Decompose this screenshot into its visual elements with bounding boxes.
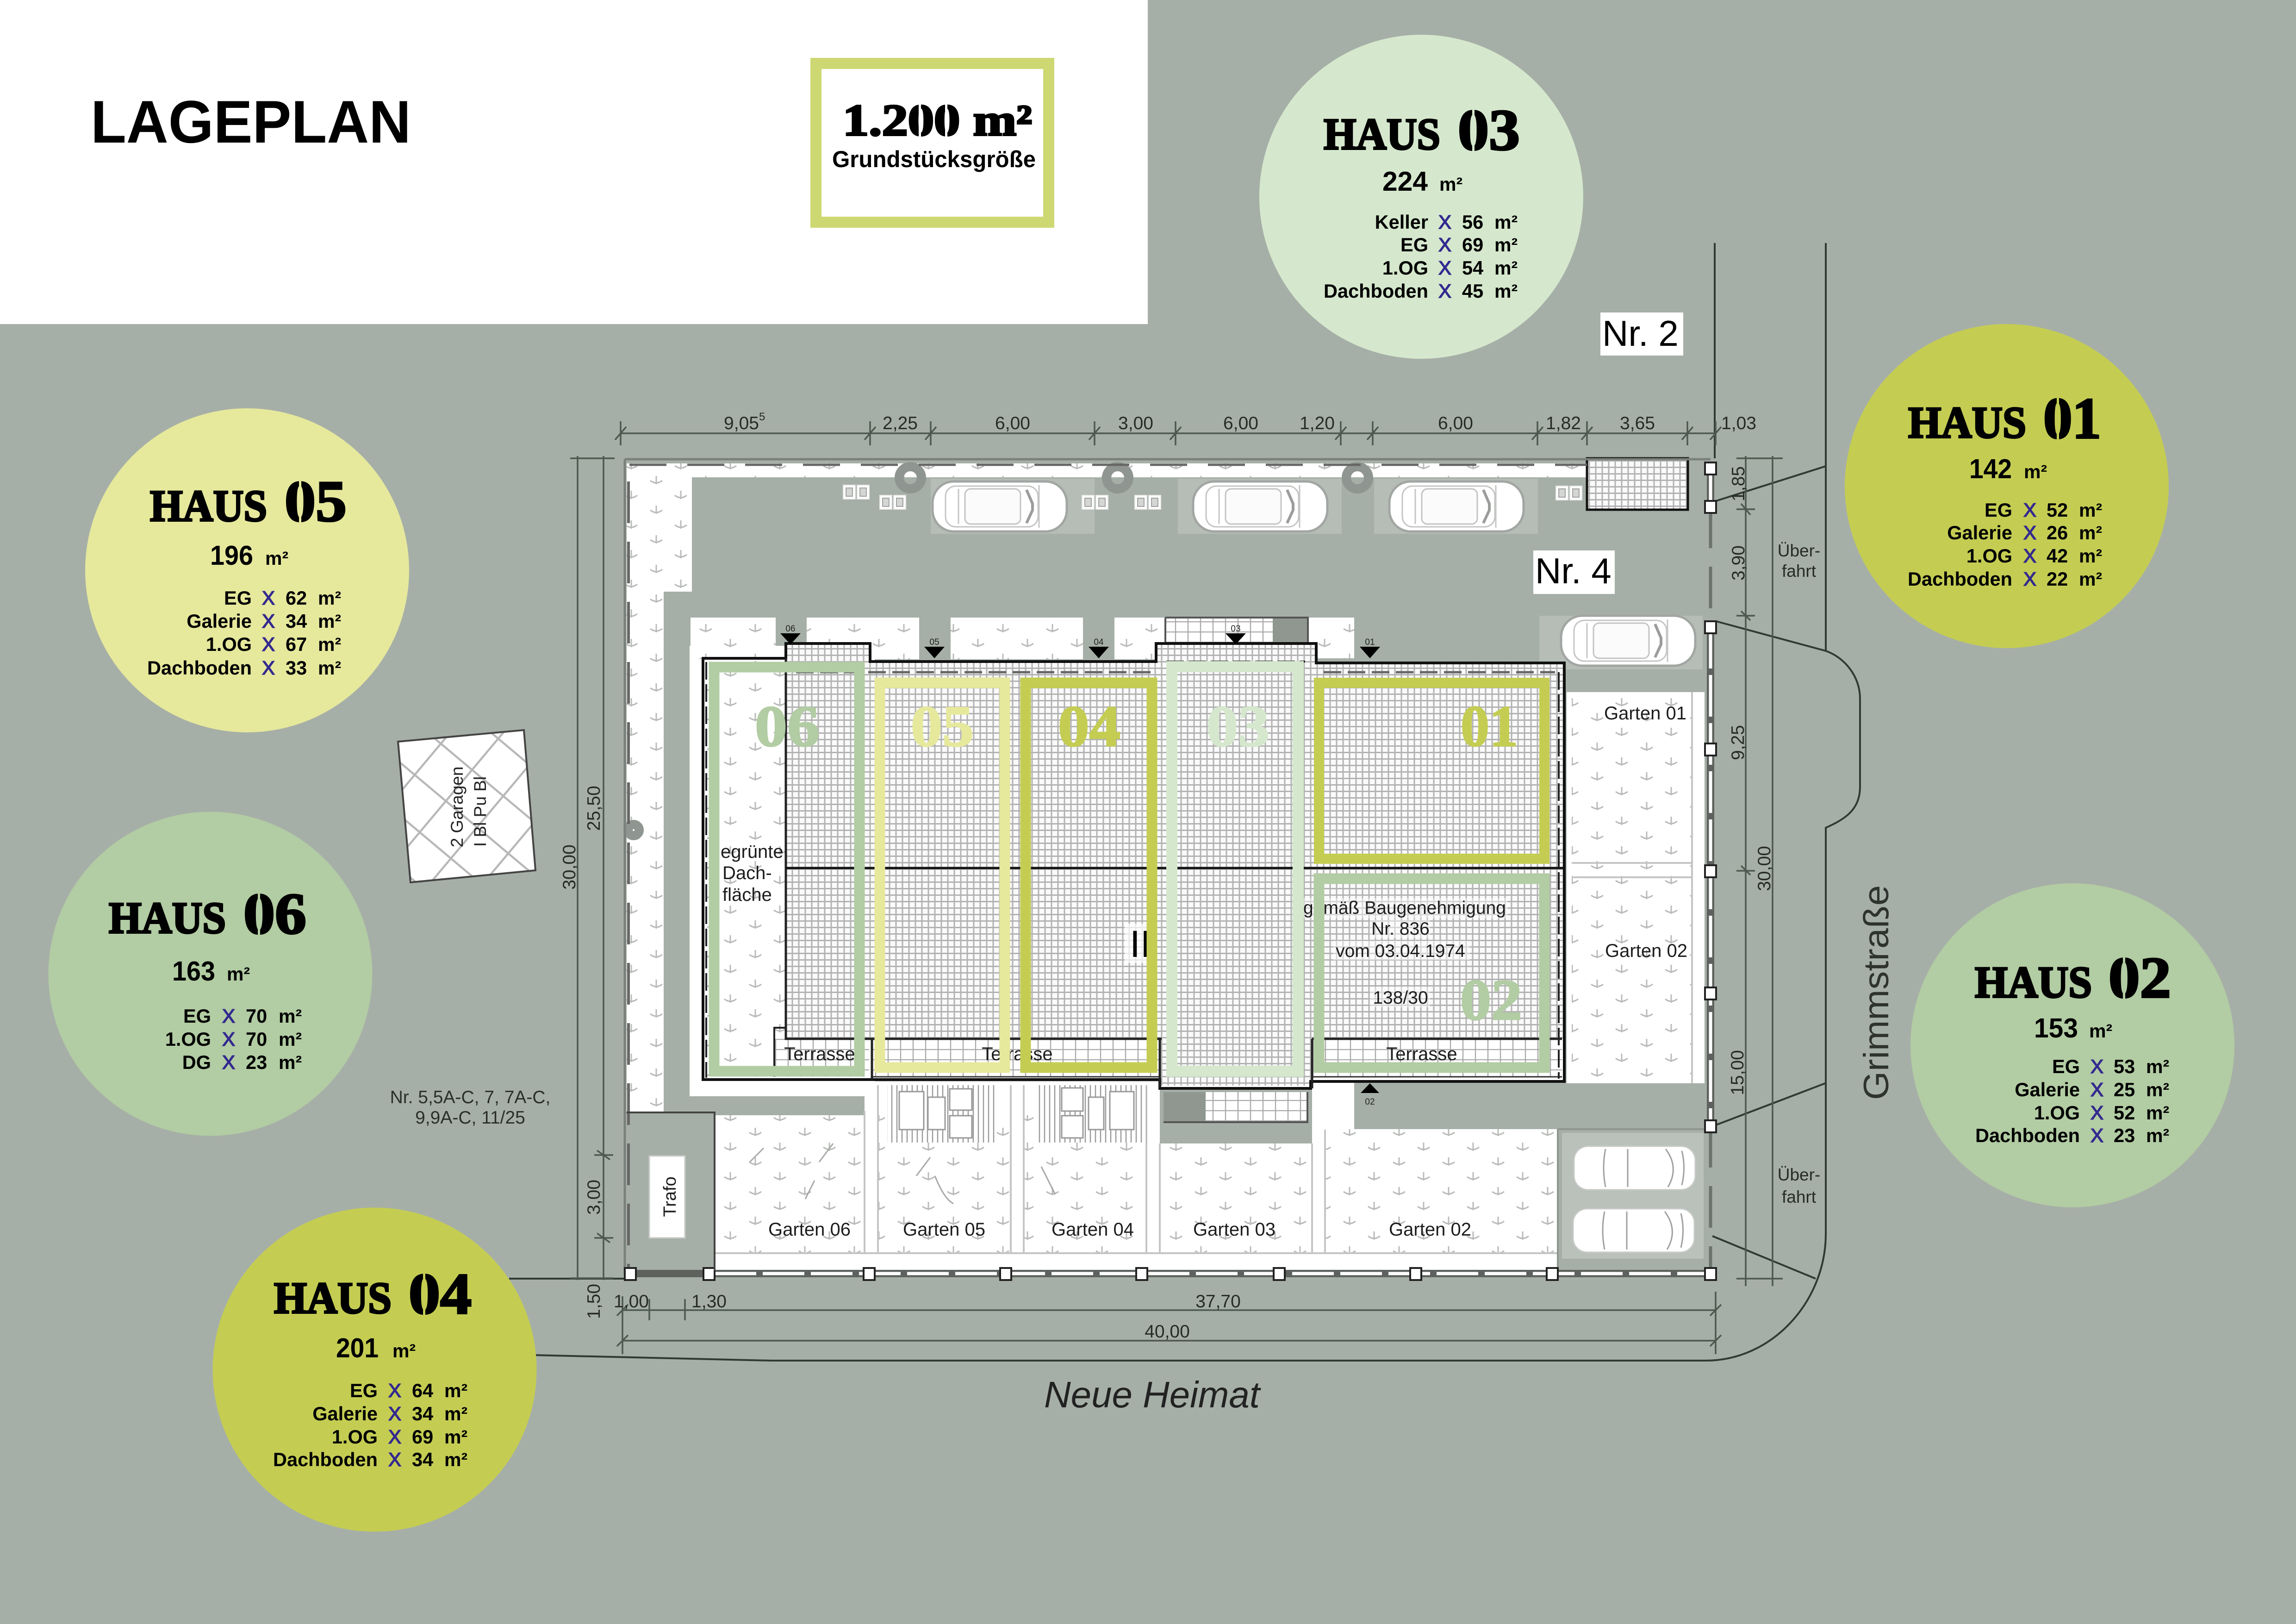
area rows (1975, 1056, 2169, 1146)
area rows: X (2091, 1102, 2103, 1124)
area rows: 1.OG (2034, 1102, 2080, 1124)
heading: 03 (1458, 98, 1520, 162)
entrance markers (780, 624, 1380, 1107)
area rows: 25 (2114, 1079, 2135, 1100)
area rows: X (262, 587, 275, 609)
total area: m² (2024, 461, 2047, 482)
area rows (1324, 211, 1518, 302)
heading: 02 (2109, 946, 2171, 1010)
dimension labels: 25,50 (584, 786, 604, 831)
area rows: EG (1400, 234, 1428, 256)
area rows: X (2091, 1056, 2103, 1077)
plan labels: Garten 04 (1052, 1219, 1134, 1240)
total area (336, 1333, 416, 1363)
plot size value: 1.200 m² (843, 95, 1032, 145)
neighbouring garages: 2 Garagen (448, 767, 467, 847)
area rows: EG (2052, 1056, 2080, 1077)
area rows: 52 (2047, 499, 2068, 521)
heading (109, 882, 306, 946)
building permit note: Nr. 836 (1371, 919, 1430, 939)
entrance markers: 01 (1365, 637, 1375, 647)
area rows: 62 (286, 587, 307, 609)
area rows: m² (318, 657, 341, 679)
area rows: EG (350, 1380, 378, 1401)
plan labels: Terrasse (784, 1044, 855, 1064)
total area: m² (2089, 1020, 2112, 1042)
heading: 01 (2043, 387, 2101, 451)
house number: 02: 02 (1460, 968, 1522, 1032)
building footprint (703, 643, 1564, 1088)
heading (1975, 946, 2171, 1010)
heading: HAUS (109, 893, 226, 943)
total area: 153 (2034, 1013, 2078, 1043)
area rows: m² (2079, 500, 2102, 521)
area rows: m² (444, 1403, 467, 1424)
total area: 142 (1969, 454, 2012, 484)
building permit note: vom 03.04.1974 (1336, 941, 1465, 961)
area rows: X (2023, 545, 2036, 567)
heading: HAUS (1975, 957, 2092, 1007)
area rows: 1.OG (332, 1426, 378, 1448)
dimension labels: 37,70 (1195, 1292, 1241, 1312)
area rows: m² (2146, 1125, 2169, 1146)
entrance markers: 05 (929, 637, 940, 647)
plan labels: Garten 02 (1389, 1219, 1471, 1240)
entrance markers: 04 (1094, 637, 1104, 647)
area rows: Galerie (1947, 522, 2012, 543)
area rows: m² (318, 587, 341, 609)
area rows: Dachboden (1908, 568, 2012, 590)
area rows: X (262, 657, 275, 679)
area rows: X (2023, 499, 2036, 521)
panel: Haus 03 (1259, 35, 1583, 359)
neighbouring garages: I Bl Pu Bl (471, 776, 490, 847)
transformer (627, 1112, 715, 1271)
dimension labels: 6,00 (1223, 413, 1258, 433)
area rows: X (388, 1449, 401, 1470)
dimension labels: 1,30 (691, 1292, 727, 1312)
entrance markers: 06 (785, 624, 796, 634)
dimension lines (570, 421, 1783, 1354)
area rows: X (388, 1380, 401, 1401)
area rows: X (222, 1051, 235, 1073)
shed at top right (1587, 458, 1688, 510)
dimension labels: 2,25 (883, 413, 918, 433)
area rows: 56 (1462, 211, 1483, 233)
gardens and planting (627, 463, 1705, 1270)
area rows (273, 1380, 467, 1470)
plan labels: Garten 03 (1193, 1219, 1276, 1240)
dimension labels: 1,20 (1300, 413, 1335, 433)
total area: 224 (1382, 166, 1428, 197)
area rows: X (222, 1005, 235, 1027)
area rows: m² (2079, 522, 2102, 543)
dimension labels: 30,00 (1755, 846, 1774, 891)
area rows: 23 (246, 1051, 267, 1073)
dimension labels: fahrt (1782, 1187, 1817, 1206)
total area: 196 (210, 540, 253, 571)
area rows (165, 1005, 302, 1073)
street name: Neue Heimat: Neue Heimat (1044, 1374, 1261, 1415)
area rows: 26 (2047, 522, 2068, 543)
total area: m² (227, 963, 250, 985)
heading: HAUS (150, 481, 267, 531)
dimension labels: 9,25 (1728, 725, 1748, 760)
area rows: 52 (2114, 1102, 2135, 1124)
terraces (774, 1028, 1562, 1077)
area rows: Dachboden (147, 657, 252, 679)
boundary fence (625, 459, 1716, 1280)
trees (628, 467, 1369, 836)
area rows: m² (2146, 1079, 2169, 1100)
area rows: X (2023, 568, 2036, 590)
area rows: Dachboden (273, 1449, 378, 1470)
area rows: X (1438, 234, 1451, 256)
storey marker: II (1130, 923, 1151, 965)
total area: 201 (336, 1333, 379, 1363)
area rows: X (1438, 211, 1451, 233)
roof ridge (786, 867, 1564, 869)
area rows: m² (2146, 1102, 2169, 1124)
panel: Haus 02 (1910, 883, 2234, 1207)
area rows: X (262, 633, 275, 655)
area rows: m² (318, 611, 341, 632)
area rows: 67 (286, 633, 307, 655)
area rows: X (388, 1403, 401, 1424)
total area: m² (265, 548, 288, 569)
heading (1324, 98, 1520, 162)
dimension labels: 9,05 (724, 413, 759, 433)
area rows: X (2091, 1079, 2103, 1100)
house outline: Haus 02 (1319, 879, 1544, 1068)
dimension labels: 1,03 (1721, 413, 1756, 433)
title: LAGEPLAN (91, 88, 411, 156)
dimension labels: 1,85 (1729, 466, 1748, 501)
dimension labels: 3,90 (1729, 545, 1748, 581)
area rows: Galerie (312, 1403, 378, 1424)
area rows (147, 587, 341, 679)
area rows: EG (1985, 499, 2012, 521)
neighbouring addresses (390, 1087, 550, 1128)
building permit note (1301, 898, 1508, 1008)
dimension labels: 6,00 (1438, 413, 1473, 433)
house outline: Haus 05 (880, 683, 1005, 1068)
area rows: X (262, 610, 275, 632)
area rows: X (1438, 280, 1451, 302)
area rows: 34 (286, 610, 307, 632)
plan labels: Garten 01 (1604, 703, 1686, 724)
area rows: X (1438, 257, 1451, 279)
area rows: X (2023, 522, 2036, 543)
plan labels: Garten 05 (903, 1219, 985, 1240)
heading (274, 1262, 472, 1326)
area rows: 45 (1462, 280, 1483, 302)
panel: Haus 04 (213, 1207, 537, 1531)
heading: HAUS (1908, 398, 2026, 447)
area rows: Dachboden (1975, 1124, 2080, 1146)
dimension labels: 6,00 (995, 413, 1030, 433)
site plan (390, 243, 1896, 1415)
waste bins (843, 485, 1582, 509)
street name: Grimmstrasse: Grimmstraße (1857, 885, 1896, 1100)
area rows: 1.OG (165, 1028, 211, 1050)
panel: Haus 05 (85, 408, 409, 732)
area rows: m² (444, 1380, 467, 1401)
plan labels (721, 703, 1687, 1240)
dimension labels: 1,50 (584, 1284, 604, 1319)
house number: 05: 05 (911, 694, 974, 759)
building permit note: 138/30 (1373, 988, 1428, 1008)
area rows: m² (2146, 1056, 2169, 1077)
house outline: Haus 04 (1026, 683, 1152, 1068)
heading: 05 (285, 469, 347, 534)
dimension labels: fahrt (1782, 562, 1817, 581)
house outline: Haus 01 (1319, 683, 1544, 859)
area rows: 1.OG (1382, 257, 1428, 279)
plan labels: egrünte (721, 842, 784, 862)
area rows: m² (444, 1426, 467, 1448)
area rows: 33 (286, 657, 307, 679)
neighbouring addresses: 9,9A-C, 11/25 (415, 1108, 525, 1128)
area rows: m² (2079, 568, 2102, 590)
house outline: Haus 06 (714, 667, 859, 1071)
area rows: m² (279, 1029, 302, 1050)
area rows: DG (182, 1051, 211, 1073)
area rows: 1.OG (206, 633, 252, 655)
heading: 04 (409, 1262, 472, 1326)
heading: HAUS (1324, 109, 1440, 159)
label: Nr. 4: Nr. 4 (1535, 550, 1612, 591)
area rows: 1.OG (1966, 545, 2012, 567)
dimension labels: 1,82 (1546, 413, 1581, 433)
total area (1382, 166, 1462, 197)
heading: HAUS (274, 1273, 392, 1323)
plan labels: Terrasse (1386, 1044, 1457, 1064)
transformer: Trafo (660, 1176, 680, 1217)
area rows: 69 (412, 1426, 433, 1448)
entrance markers: 02 (1365, 1097, 1375, 1107)
dimension labels: 5 (759, 411, 765, 423)
total area: m² (1439, 174, 1462, 195)
area rows: 23 (2114, 1124, 2135, 1146)
panel: plot size box (816, 63, 1049, 222)
area rows: m² (279, 1006, 302, 1027)
panel: Haus 06 (48, 812, 372, 1136)
area rows: X (2091, 1124, 2103, 1146)
building permit note: gemäß Baugenehmigung (1303, 898, 1506, 918)
dimension labels: Über- (1778, 541, 1820, 560)
road and plot boundary lines (509, 243, 1860, 1361)
heading (150, 469, 347, 534)
area rows: X (388, 1426, 401, 1448)
area rows (1908, 499, 2102, 590)
walls (703, 643, 1564, 1088)
plan labels: Garten 06 (768, 1219, 851, 1240)
area rows: 42 (2047, 545, 2068, 567)
area rows: 69 (1462, 234, 1483, 256)
area rows: m² (1494, 212, 1518, 233)
area rows: EG (224, 587, 252, 609)
area rows: 34 (412, 1403, 433, 1424)
staircases (1164, 618, 1308, 1122)
cars (933, 481, 1695, 1252)
heading: 06 (243, 882, 306, 946)
dimension labels: 3,65 (1620, 413, 1655, 433)
plan labels: Dach- (722, 863, 772, 883)
plot size label: Grundstücksgröße (832, 146, 1036, 172)
neighbouring garages (398, 730, 535, 882)
dimension labels: 3,00 (1118, 413, 1153, 433)
area rows: 34 (412, 1449, 433, 1470)
total area: 163 (172, 956, 215, 987)
area rows: m² (1494, 257, 1518, 279)
plan labels: Garten 02 (1605, 941, 1687, 961)
dimension labels: Über- (1778, 1165, 1820, 1184)
heading (1908, 387, 2101, 451)
area rows: 70 (246, 1005, 267, 1027)
house number: 04: 04 (1058, 694, 1120, 759)
area rows: 53 (2114, 1056, 2135, 1077)
dimension labels (560, 411, 1820, 1342)
panel: Haus 01 (1845, 324, 2169, 648)
area rows: X (222, 1028, 235, 1050)
green roof (707, 661, 786, 1079)
total area (2034, 1013, 2112, 1043)
area rows: 70 (246, 1028, 267, 1050)
total area (1969, 454, 2047, 484)
total area: m² (392, 1340, 416, 1362)
dimension labels: 15,00 (1728, 1050, 1748, 1095)
total area (210, 540, 288, 571)
total area (172, 956, 250, 987)
area rows: m² (1494, 234, 1518, 256)
area rows: m² (1494, 281, 1518, 302)
panel: white header (0, 0, 1148, 324)
parking areas (931, 479, 1712, 1269)
neighbouring addresses: Nr. 5,5A-C, 7, 7A-C, (390, 1087, 550, 1107)
house number: 03: 03 (1207, 694, 1269, 759)
area rows: m² (279, 1052, 302, 1073)
area rows: EG (183, 1005, 211, 1027)
area rows: 54 (1462, 257, 1483, 279)
area rows: Dachboden (1324, 280, 1428, 302)
area rows: m² (2079, 545, 2102, 567)
dimension labels: 30,00 (560, 844, 579, 890)
plan labels: fläche (722, 885, 772, 905)
area rows: m² (318, 634, 341, 655)
area rows: 64 (412, 1380, 433, 1401)
house number: 06: 06 (755, 694, 820, 759)
house outline: Haus 03 (1172, 667, 1298, 1071)
dimension labels: 40,00 (1145, 1322, 1190, 1342)
dimension labels: 1,00 (614, 1292, 649, 1312)
area rows: 22 (2047, 568, 2068, 590)
entrance markers: 03 (1231, 624, 1241, 634)
area rows: Keller (1375, 211, 1428, 233)
area rows: Galerie (187, 610, 252, 632)
area rows: Galerie (2015, 1079, 2080, 1100)
dimension labels: 3,00 (584, 1180, 604, 1215)
area rows: m² (444, 1449, 467, 1470)
label: Nr. 2: Nr. 2 (1602, 313, 1679, 354)
plan labels: Terrasse (982, 1044, 1053, 1064)
house number: 01: 01 (1461, 694, 1518, 759)
